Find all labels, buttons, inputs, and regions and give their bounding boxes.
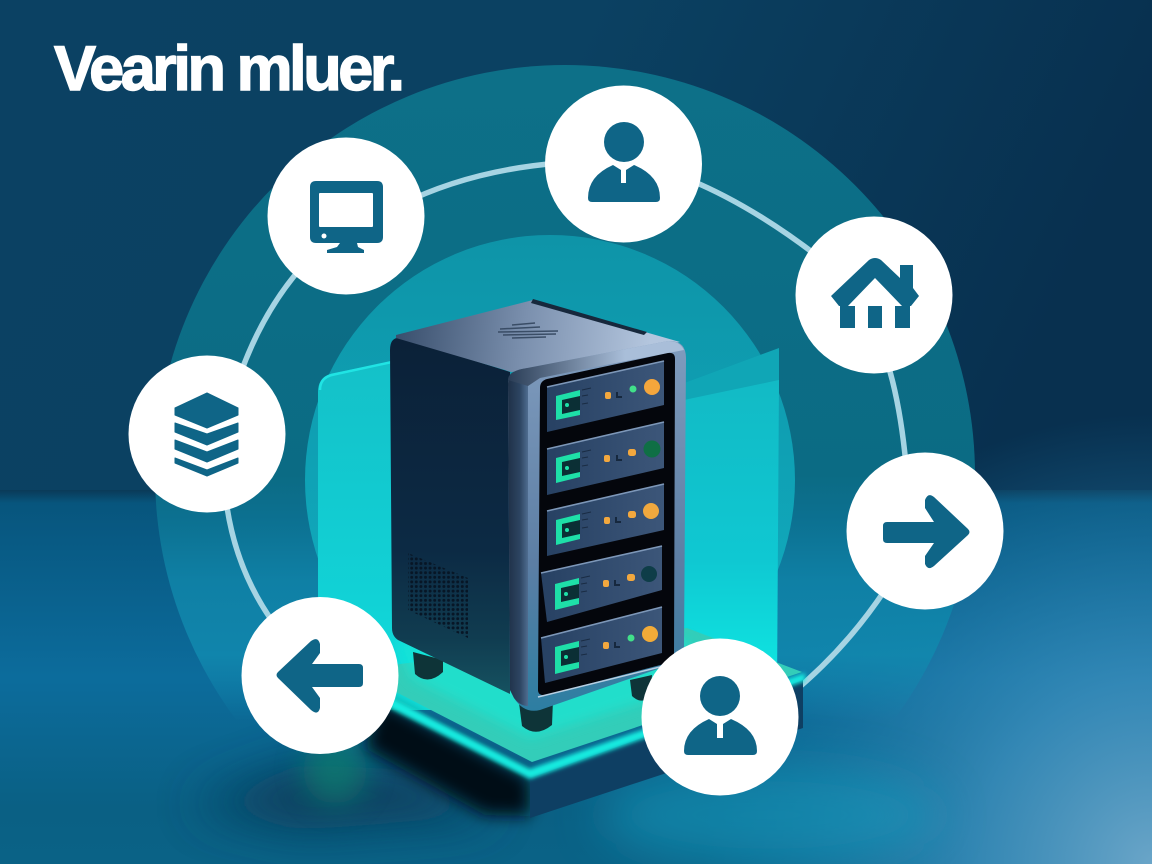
outer halo circle xyxy=(155,65,975,864)
connection ring xyxy=(226,163,906,695)
platform dark left shadow xyxy=(365,698,530,816)
rack unit 2 xyxy=(547,422,664,495)
inner glow circle xyxy=(305,235,795,725)
glass panel right xyxy=(660,380,779,700)
platform glow edge xyxy=(390,673,805,779)
node: user bottom xyxy=(642,638,798,796)
icon: arrow right xyxy=(883,495,970,568)
server top face xyxy=(396,300,680,372)
icon: user xyxy=(588,122,660,202)
glass panel left top highlight xyxy=(320,362,392,390)
platform base front xyxy=(530,680,803,818)
green reflection xyxy=(303,736,367,804)
platform xyxy=(190,628,805,830)
icon: user xyxy=(684,676,757,755)
server side face xyxy=(390,338,510,694)
server xyxy=(390,299,686,732)
icon: layers stack xyxy=(175,393,238,476)
node: database stack xyxy=(128,356,286,512)
rack unit 4 xyxy=(541,546,662,622)
node: user top xyxy=(545,86,702,242)
icon: monitor xyxy=(310,181,383,253)
floor xyxy=(0,490,1152,864)
frame left corner strip xyxy=(508,368,528,706)
platform light glow under server xyxy=(395,640,690,738)
floor shadow xyxy=(190,765,500,830)
rack unit 5 xyxy=(541,607,662,683)
top rear lip xyxy=(531,299,647,335)
frame top highlight xyxy=(508,341,684,386)
title: Vearin mluer. xyxy=(54,34,405,104)
server feet xyxy=(413,652,652,732)
platform top xyxy=(392,628,802,762)
rack unit 1 xyxy=(547,361,664,432)
glass panel right top xyxy=(660,348,779,420)
frame inner black bay xyxy=(538,353,675,695)
node: arrow left xyxy=(242,597,398,754)
background wall xyxy=(0,0,1152,505)
server front frame xyxy=(508,341,686,711)
rack unit 3 xyxy=(547,484,664,556)
icon: home xyxy=(831,258,919,328)
frame bottom highlight xyxy=(538,664,672,697)
node: home xyxy=(796,216,952,374)
icon: arrow left xyxy=(276,639,363,713)
node: arrow right xyxy=(846,452,1004,610)
side ventilation grid xyxy=(408,553,468,638)
node: monitor xyxy=(268,138,424,294)
top vent xyxy=(498,323,558,338)
floor corner light xyxy=(702,414,1152,864)
floor centre light xyxy=(600,765,940,864)
glass panel left xyxy=(318,352,440,710)
